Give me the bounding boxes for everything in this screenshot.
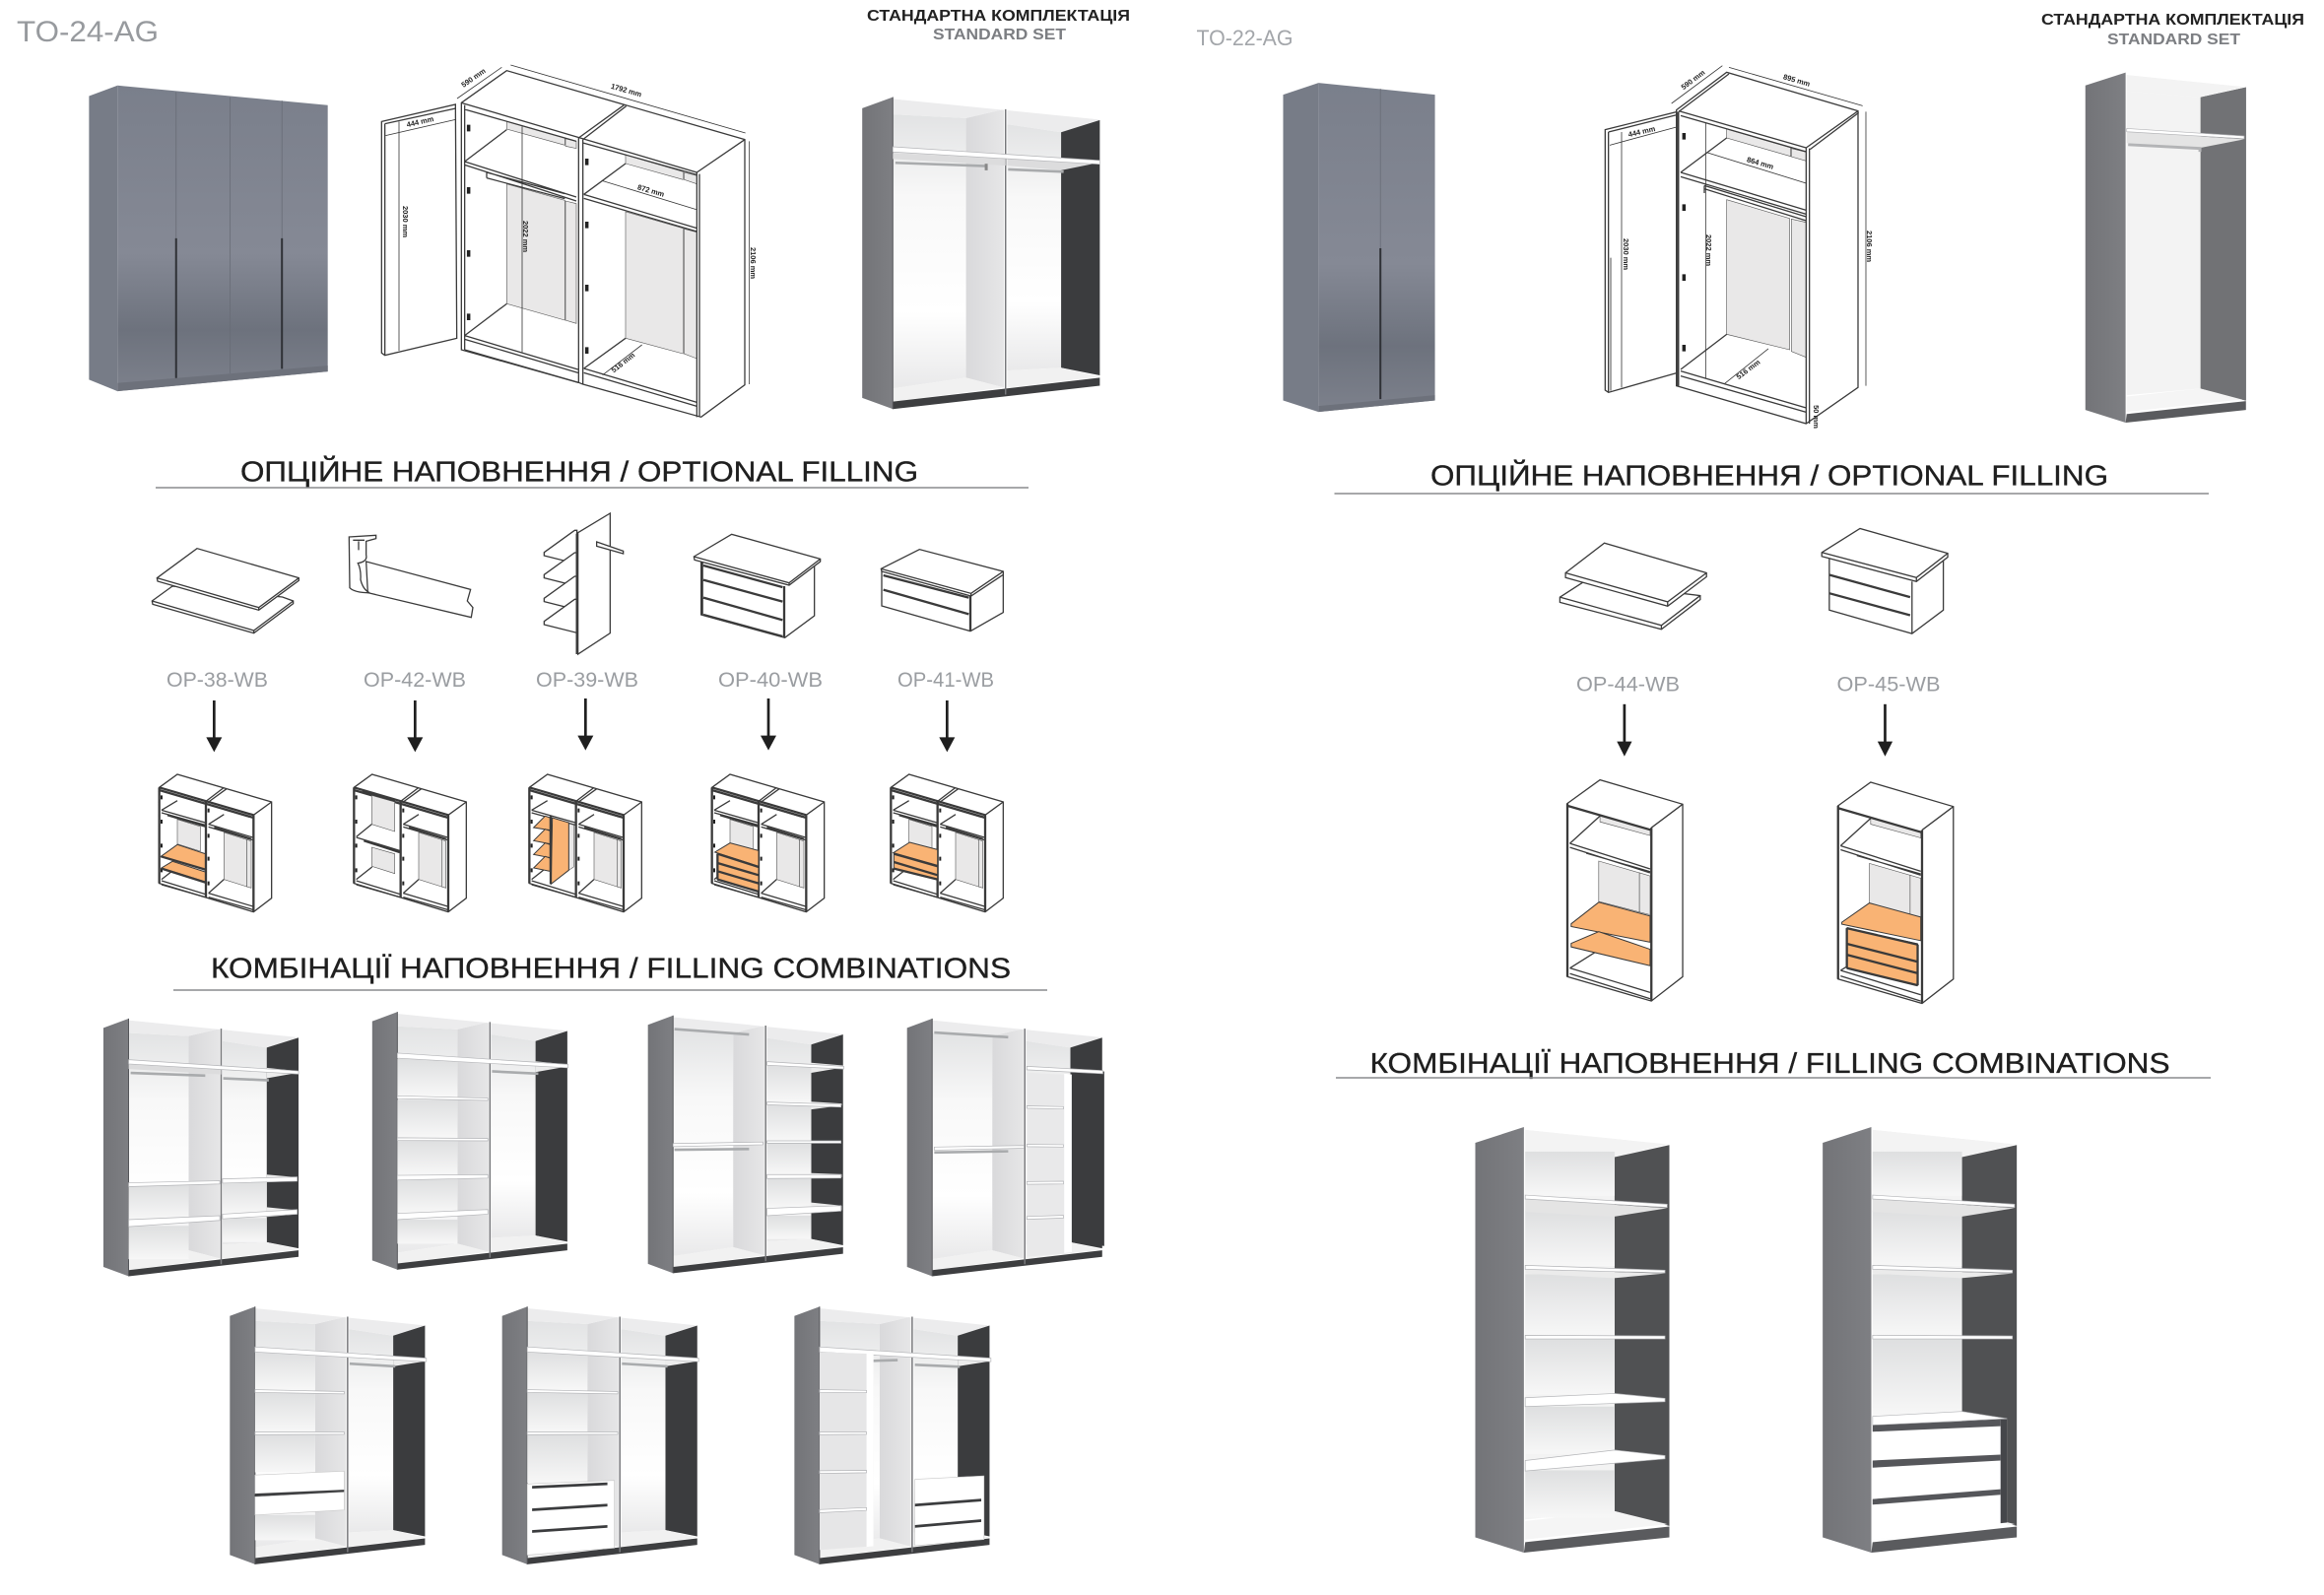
dimension drawing, open wardrobe: 516 mm <box>1735 358 1762 381</box>
closed four-door wardrobe <box>89 86 328 391</box>
dimension drawing, open wardrobe: 864 mm <box>1746 155 1775 171</box>
part icon: OP-42-WB rail <box>349 535 473 618</box>
combination D <box>907 1019 1104 1277</box>
dimension drawing, open wardrobe <box>1605 66 1874 429</box>
part icon: OP-45-WB drawers <box>1822 529 1948 633</box>
optional filling parts and arrows <box>1560 529 1954 1003</box>
part icon: OP-41-WB two drawers <box>881 550 1003 631</box>
combination A <box>103 1019 299 1277</box>
standard set heading: СТАНДАРТНА КОМПЛЕКТАЦІЯ <box>2041 12 2304 29</box>
standard set heading: STANDARD SET <box>2107 32 2241 48</box>
dimension drawing, open wardrobe: 50 mm <box>1812 405 1821 429</box>
heading: optional filling: ОПЦІЙНЕ НАПОВНЕННЯ / OPTIONAL FILLING <box>240 457 918 489</box>
part icon: OP-38-WB shelves <box>152 549 299 633</box>
label OP-40-WB: OP-40-WB <box>718 669 823 692</box>
thumbnail with OP-39 tower highlighted <box>529 774 641 912</box>
thumbnail with OP-41 drawers highlighted <box>891 774 1003 912</box>
thumbnail with OP-42 rail <box>354 774 466 912</box>
dimension drawing, open wardrobe: 590 mm <box>460 66 488 90</box>
model code TO-22-AG: TO-22-AG <box>1196 26 1293 50</box>
combination: six shelves <box>1475 1127 1670 1553</box>
standard set heading: STANDARD SET <box>933 27 1067 43</box>
label OP-44-WB: OP-44-WB <box>1576 674 1680 696</box>
dimension drawing, open wardrobe: 2030 mm <box>1622 238 1630 270</box>
dimension drawing, open wardrobe: 2022 mm <box>1704 234 1713 266</box>
part icon: OP-40-WB three drawers <box>694 534 821 637</box>
standard set wardrobe interior <box>2086 73 2246 423</box>
label OP-45-WB: OP-45-WB <box>1836 674 1941 696</box>
heading: optional filling: ОПЦІЙНЕ НАПОВНЕННЯ / OPTIONAL FILLING <box>1430 461 2108 493</box>
dimension drawing, open wardrobe <box>381 65 758 417</box>
filling combination wardrobes <box>1475 1127 2017 1553</box>
arrow OP-41 <box>939 700 955 752</box>
model code TO-24-AG: TO-24-AG <box>17 16 159 48</box>
combination F <box>502 1306 698 1564</box>
dimension drawing, open wardrobe: 590 mm <box>1680 68 1707 92</box>
arrow OP-44 <box>1617 704 1632 757</box>
dimension drawing, open wardrobe: 2022 mm <box>521 221 530 252</box>
standard set heading <box>2041 12 2304 48</box>
thumbnail with OP-44 shelves highlighted <box>1567 780 1683 1001</box>
thumbnail with OP-38 shelves highlighted <box>160 774 272 912</box>
label OP-38-WB: OP-38-WB <box>166 669 268 692</box>
dimension drawing, open wardrobe: 2030 mm <box>401 206 410 237</box>
closed two-door wardrobe <box>1283 83 1435 412</box>
part icon: OP-44-WB shelves <box>1560 543 1706 630</box>
heading: filling combinations: КОМБІНАЦІЇ НАПОВНЕННЯ / FILLING COMBINATIONS <box>211 954 1011 985</box>
combination G <box>794 1306 991 1564</box>
dimension drawing, open wardrobe: 895 mm <box>1782 72 1812 89</box>
label OP-42-WB: OP-42-WB <box>364 669 466 692</box>
arrow OP-39 <box>577 698 593 751</box>
panel: TO-24-AG <box>17 8 1130 1564</box>
heading: filling combinations: КОМБІНАЦІЇ НАПОВНЕННЯ / FILLING COMBINATIONS <box>1369 1048 2169 1080</box>
dimension drawing, open wardrobe: 444 mm <box>1627 124 1656 139</box>
combination B <box>372 1012 568 1270</box>
dimension drawing, open wardrobe: 2106 mm <box>749 247 758 279</box>
arrow OP-45 <box>1878 704 1892 757</box>
dimension drawing, open wardrobe: 516 mm <box>610 351 636 374</box>
part icon: OP-39-WB shelf tower <box>544 513 624 654</box>
arrow OP-42 <box>407 700 423 752</box>
dimension drawing, open wardrobe: 444 mm <box>406 114 434 129</box>
arrow OP-38 <box>206 700 222 752</box>
optional filling parts, arrows and thumbnails, second group <box>694 534 1003 912</box>
dimension drawing, open wardrobe: 872 mm <box>636 182 666 199</box>
standard set wardrobe interior <box>862 97 1099 409</box>
combination E <box>230 1306 427 1564</box>
optional filling parts, arrows and thumbnails, first group <box>152 513 641 912</box>
dimension drawing, open wardrobe: 2106 mm <box>1865 231 1874 262</box>
standard set heading: СТАНДАРТНА КОМПЛЕКТАЦІЯ <box>867 8 1130 25</box>
label OP-39-WB: OP-39-WB <box>536 669 638 692</box>
standard set heading <box>867 8 1130 43</box>
thumbnail with OP-45 drawers highlighted <box>1838 782 1954 1003</box>
combination: shelves with three drawers <box>1823 1127 2017 1553</box>
arrow OP-40 <box>761 698 776 751</box>
thumbnail with OP-40 drawers highlighted <box>712 774 825 912</box>
dimension drawing, open wardrobe: 1792 mm <box>610 82 643 99</box>
filling combination wardrobes <box>103 1012 1104 1564</box>
combination C <box>648 1016 843 1273</box>
panel: TO-22-AG <box>1196 12 2304 1553</box>
label OP-41-WB: OP-41-WB <box>897 669 994 692</box>
